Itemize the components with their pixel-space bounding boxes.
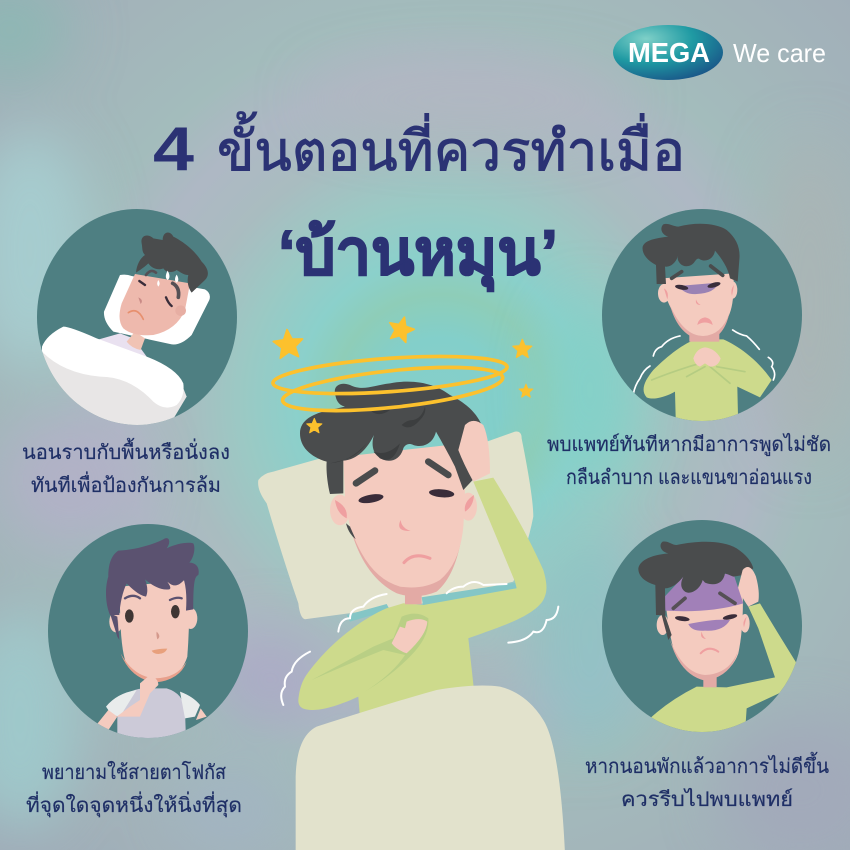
sleeve folds [312, 614, 428, 692]
circle backdrop [602, 209, 802, 421]
logo oval [613, 25, 723, 80]
blanket [296, 686, 565, 850]
eyebrows [356, 462, 448, 483]
logo: MEGA We care [613, 25, 826, 80]
nose [399, 520, 411, 531]
collar gaps [347, 583, 518, 622]
mouth [404, 556, 430, 563]
hair shading [330, 407, 425, 463]
caption: focus eyes: ที่จุดใดจุดหนึ่งให้นิ่งที่สุด [26, 791, 242, 818]
ears [330, 493, 477, 525]
illustration: man holding forehead [638, 542, 797, 737]
hair [300, 382, 483, 539]
caption: if not better after rest [585, 752, 829, 811]
caption: see a doctor immediately: กลืนลำบาก และแขนขาอ่อนแรง [566, 467, 812, 489]
logo wordmark MEGA: MEGA [628, 37, 710, 68]
logo tagline We care: We care [733, 38, 826, 68]
number 4: 4 [153, 115, 195, 184]
panel: focus eyes [48, 524, 248, 740]
caption: if not better after rest: ควรรีบไปพบแพทย์ [621, 788, 793, 811]
title text: ขั้นตอนที่ควรทำเมื่อ [217, 112, 685, 182]
illustration: man thinking [95, 538, 207, 740]
dizzy stars [272, 314, 533, 433]
hand on head [458, 421, 490, 482]
title line 1 [153, 112, 685, 184]
title line 2: ‘บ้านหมุน’ [278, 218, 558, 292]
pyjama body [298, 478, 546, 718]
caption: focus eyes: พยายามใช้สายตาโฟกัส [42, 761, 226, 784]
closed eyes [358, 488, 455, 505]
illustration: man with clenched hands [633, 224, 775, 430]
panel: if not better after rest [602, 520, 802, 737]
panel: lie down [37, 209, 237, 430]
hand on chest [392, 619, 427, 653]
dizzy halo rings [272, 350, 508, 419]
face [343, 443, 465, 596]
central illustration: dizzy man in bed [258, 314, 565, 850]
caption: focus eyes [26, 761, 242, 818]
circle backdrop [602, 520, 802, 732]
neck [405, 592, 422, 604]
caption: see a doctor immediately: พบแพทย์ทันทีหากมีอาการพูดไม่ชัด [547, 433, 831, 457]
caption: lie down [22, 438, 230, 497]
illustration: man lying with sweat [40, 233, 210, 430]
circle backdrop [37, 209, 237, 425]
caption: see a doctor immediately [547, 433, 831, 489]
circle backdrop [48, 524, 248, 738]
caption: lie down: นอนราบกับพื้นหรือนั่งลง [22, 438, 230, 464]
panel: see a doctor immediately [602, 209, 802, 430]
shaking lines [281, 582, 558, 705]
pillow [258, 432, 533, 619]
caption: lie down: ทันทีเพื่อป้องกันการล้ม [31, 471, 221, 497]
caption: if not better after rest: หากนอนพักแล้วอาการไม่ดีขึ้น [585, 752, 829, 778]
